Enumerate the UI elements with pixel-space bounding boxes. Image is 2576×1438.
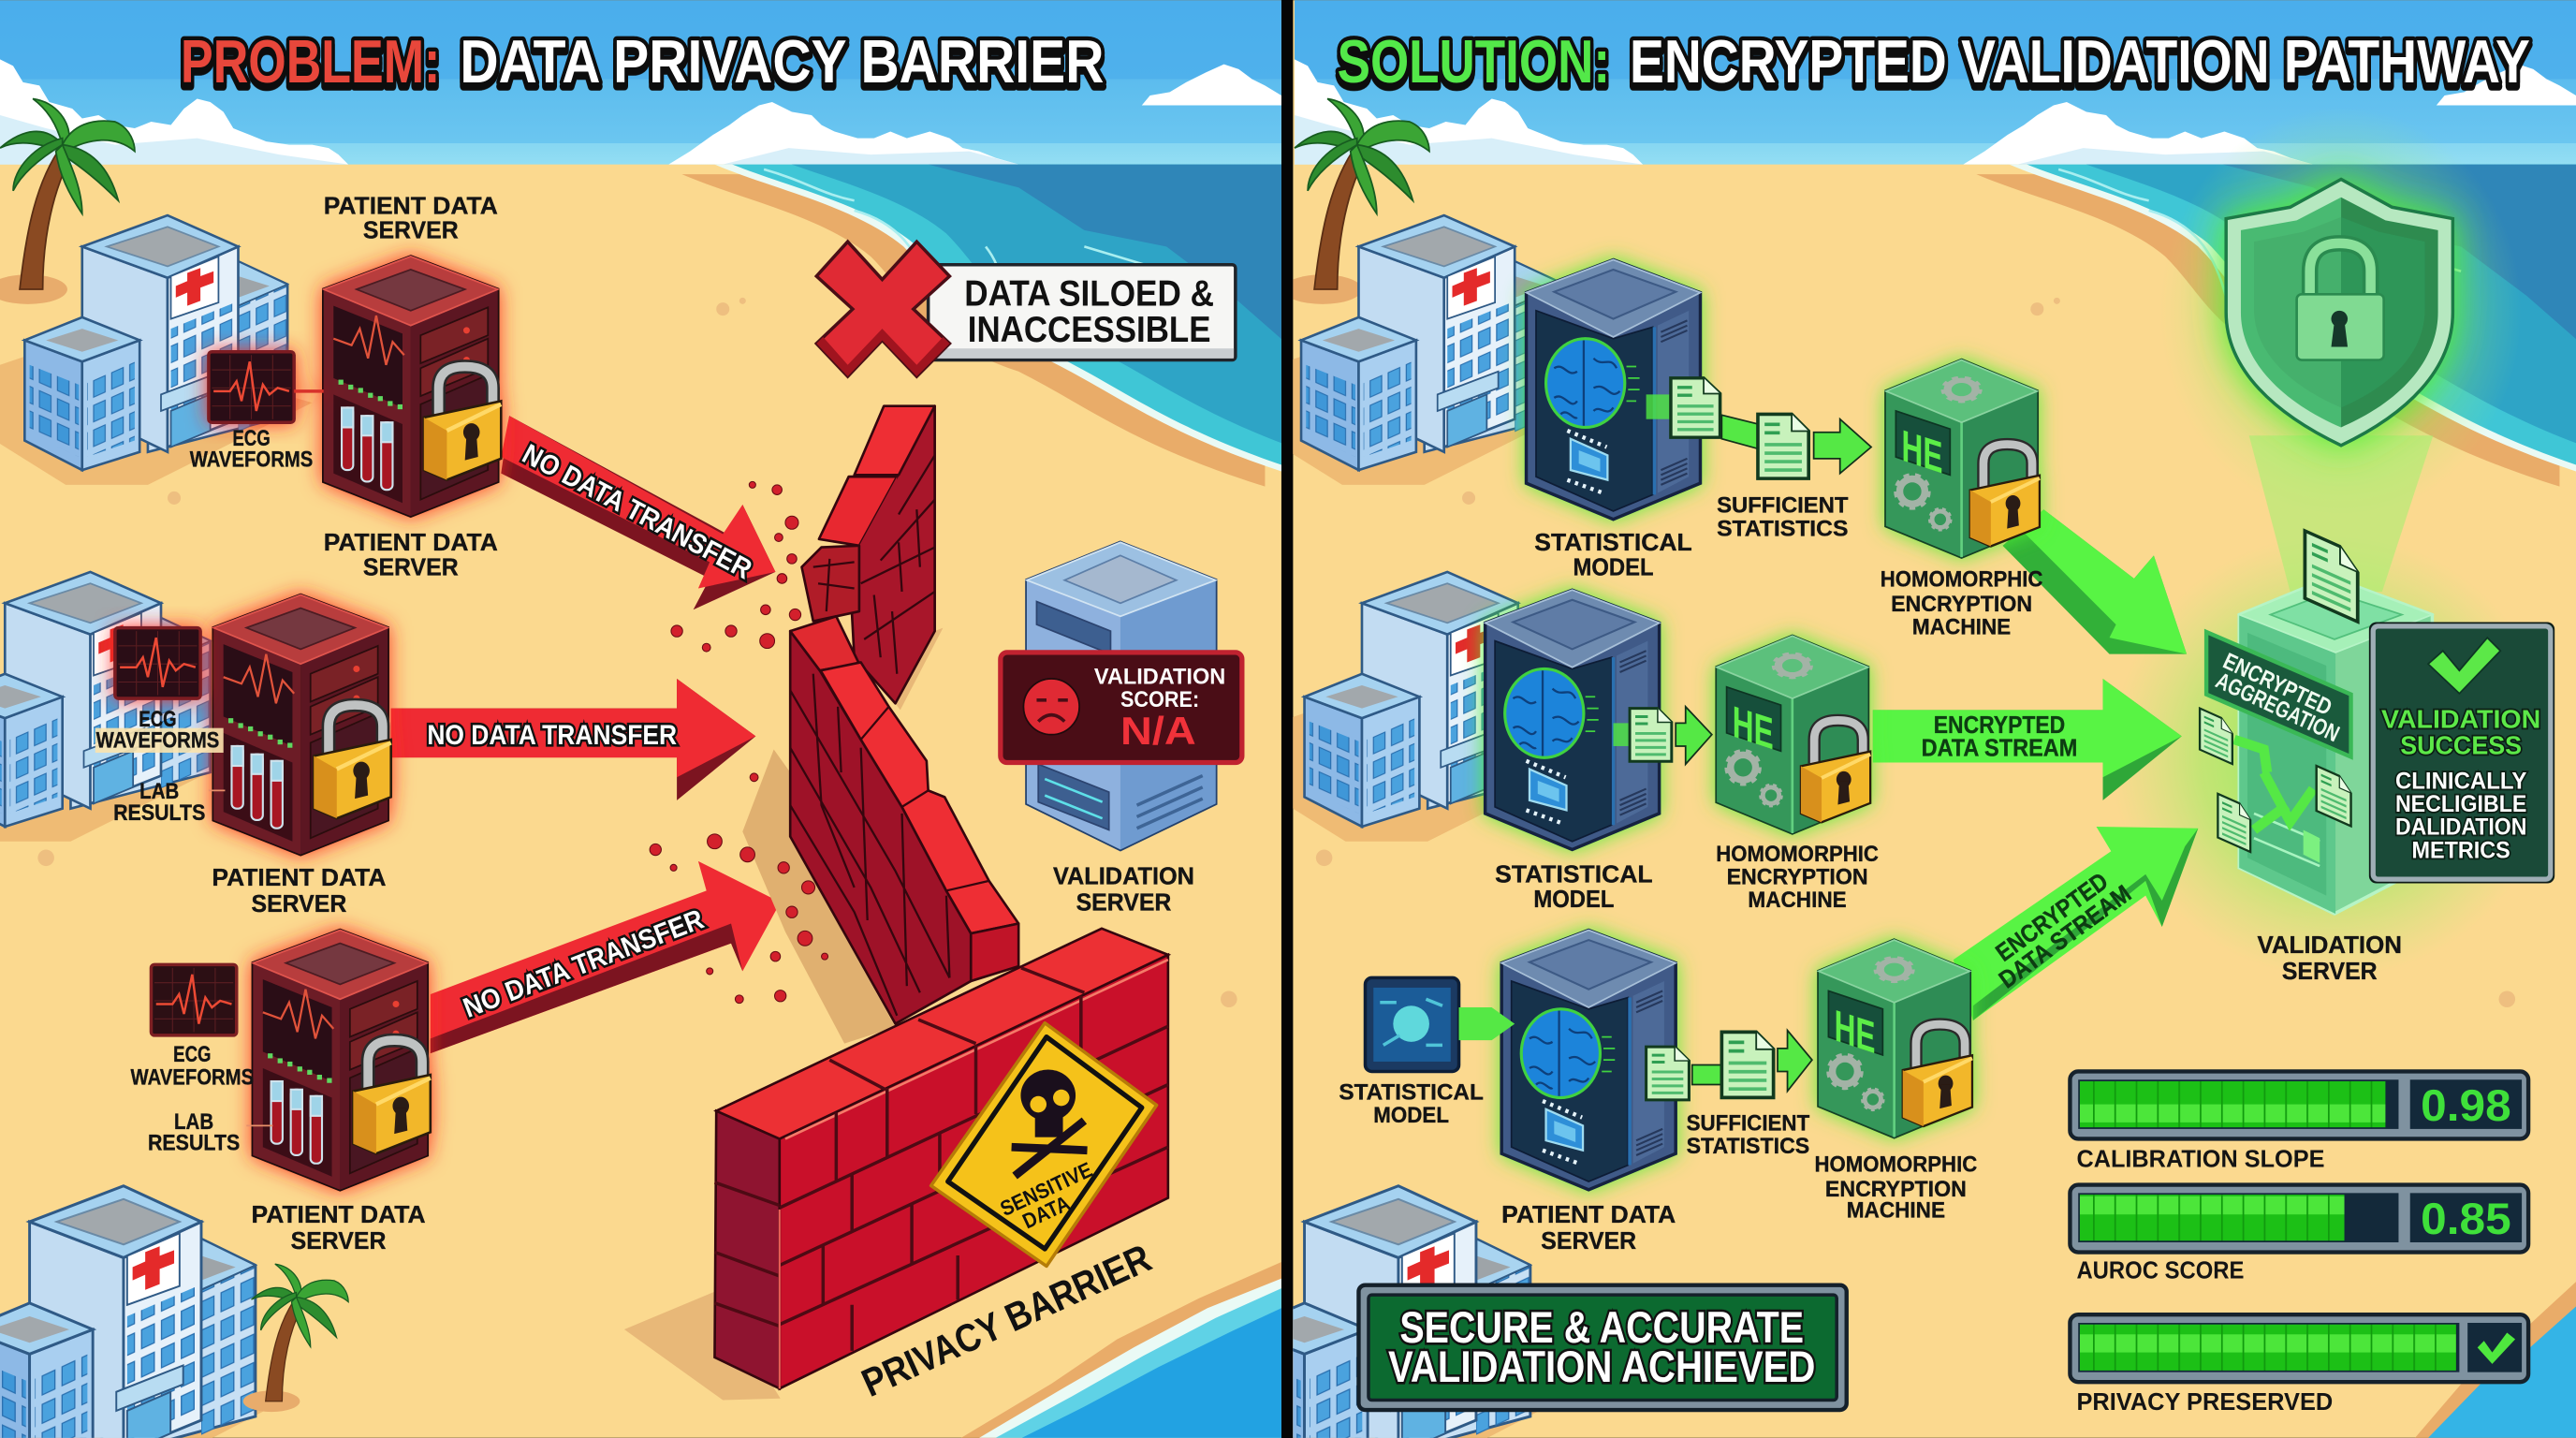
row 3 data flow	[1365, 977, 1812, 1100]
icon: HE machine 3: HE	[1835, 1001, 1875, 1064]
icon: hospital 4	[1293, 213, 1557, 485]
arrow: encrypted data stream 2: ENCRYPTED	[1934, 711, 2065, 739]
arrow: encrypted data stream 3: DATA STREAM	[1994, 879, 2136, 994]
icon: statistical model server 1	[1526, 259, 1701, 520]
label: patient data server 3: PATIENT DATA	[252, 1200, 426, 1228]
label: homomorphic encryption machine 3	[1815, 1153, 1977, 1224]
label: patient data server 1: SERVER	[363, 552, 459, 580]
label: ECG waveforms 3: WAVEFORMS	[131, 1066, 254, 1091]
label: validation server	[1053, 861, 1194, 916]
label: sufficient statistics 3	[1687, 1112, 1810, 1159]
arrow: encrypted data stream 2	[1873, 679, 2182, 800]
callout: data siloed: DATA SILOED &	[964, 274, 1214, 315]
label: sufficient statistics 1	[1717, 494, 1849, 541]
label: statistical model 2: MODEL	[1533, 885, 1614, 913]
barrier wall: upper section	[742, 406, 1018, 1044]
callout: data siloed: INACCESSIBLE	[968, 310, 1211, 350]
icon: red X	[816, 242, 949, 376]
label: homomorphic encryption machine 2: ENCRYPTION	[1727, 865, 1868, 889]
icon: ECG monitor 2	[115, 628, 200, 698]
icon: validation server green	[2239, 577, 2432, 914]
icon: success check	[2428, 638, 2500, 694]
barrier wall: front section	[624, 929, 1168, 1400]
callout: data siloed	[929, 265, 1236, 360]
label: patient data server 3: SERVER	[291, 1226, 386, 1255]
icon: sad face	[1023, 679, 1079, 735]
label: homomorphic encryption machine 3: MACHINE	[1847, 1199, 1945, 1224]
icon: patient data server green	[1501, 931, 1676, 1190]
panel: validation success: NECLIGIBLE	[2395, 792, 2526, 817]
label: statistical model 2	[1495, 860, 1653, 913]
label: ECG waveforms 3: ECG	[173, 1043, 212, 1067]
icon: HE machine 1: HE	[1902, 421, 1942, 483]
icon: ECG monitor 3	[151, 964, 237, 1035]
label: encrypted aggregation tag: ENCRYPTED	[2219, 649, 2335, 721]
icon: document 5	[1721, 1032, 1774, 1097]
icon: HE machine 3	[1819, 940, 1972, 1137]
label: sufficient statistics 3: STATISTICS	[1687, 1135, 1809, 1159]
icon: hospital 3	[0, 1186, 283, 1438]
icon: document 3	[1630, 709, 1672, 761]
label: ECG waveforms 3	[131, 1043, 254, 1091]
panel: validation success: VALIDATION	[2381, 705, 2540, 734]
label: homomorphic encryption machine 1	[1881, 568, 2042, 640]
icon: document 1	[1671, 378, 1720, 437]
arrow: doc to stats	[1721, 415, 1758, 448]
label: sufficient statistics 1: SUFFICIENT	[1717, 494, 1849, 519]
arrow: doc to machine 3	[1778, 1031, 1812, 1092]
icon: hospital 2	[0, 572, 235, 842]
label: validation server: SERVER	[1076, 888, 1171, 916]
panel: validation success: SUCCESS	[2400, 731, 2522, 760]
metric: AUROC score: 0.85	[2421, 1195, 2511, 1244]
banner: secure and accurate validation: VALIDATION ACHIEVED	[1388, 1343, 1815, 1392]
icon: hospital 5	[1293, 571, 1521, 842]
label: validation server green	[2258, 931, 2402, 985]
arrow: green arrow from machine 1	[2002, 509, 2187, 654]
metric: calibration slope: 0.98	[2421, 1081, 2511, 1131]
label: ECG waveforms 1: WAVEFORMS	[190, 448, 313, 473]
arrow: no data transfer 2	[391, 679, 755, 800]
arrow: monitor to server	[1459, 1007, 1515, 1040]
banner: secure and accurate validation: SECURE & ACCURATE	[1399, 1303, 1804, 1353]
icon: ECG monitor 1	[209, 352, 324, 422]
label: sufficient statistics 3: SUFFICIENT	[1687, 1112, 1810, 1137]
label: patient data server 2: PATIENT DATA	[212, 863, 386, 891]
label: patient data server 1	[324, 528, 498, 580]
label: statistical model 1	[1534, 528, 1692, 580]
metric: AUROC score	[2070, 1185, 2528, 1284]
icon: statistical model server 2	[1486, 590, 1660, 850]
label: patient data server 3	[252, 1200, 426, 1255]
arrow: encrypted data stream 3	[1954, 827, 2198, 1020]
label: patient data server 2	[212, 863, 386, 917]
label: patient data server 1: PATIENT DATA	[324, 528, 498, 556]
icon: document entering server	[2305, 531, 2358, 622]
label: lab results 2: LAB	[139, 780, 179, 804]
arrow: no data transfer 2: NO DATA TRANSFER	[427, 720, 677, 751]
arrow: doc 4 to doc 5	[1692, 1064, 1721, 1085]
icon: patient data server 2	[213, 594, 391, 855]
icon: sensitive data warning sign: SENSITIVE	[996, 1157, 1096, 1221]
metric: AUROC score: AUROC SCORE	[2076, 1256, 2244, 1284]
panel: problem background	[0, 0, 1340, 1438]
metric: privacy preserved: PRIVACY PRESERVED	[2076, 1387, 2333, 1416]
label: sufficient statistics 1: STATISTICS	[1717, 517, 1848, 541]
icon: document 4	[1647, 1047, 1689, 1100]
arrow: encrypted data stream 3: ENCRYPTED	[1990, 867, 2114, 967]
icon: statistical model monitor	[1365, 977, 1459, 1071]
debris: broken bricks	[650, 481, 828, 1004]
icon: sensitive data warning sign	[931, 1023, 1157, 1266]
label: patient data server top: SERVER	[363, 216, 459, 244]
label: homomorphic encryption machine 2: MACHINE	[1748, 888, 1847, 913]
icon: shield padlock	[2297, 243, 2384, 360]
icon: shield	[2226, 179, 2452, 446]
arrow: encrypted data stream 2: DATA STREAM	[1922, 733, 2077, 761]
panel: validation success: DALIDATION	[2395, 815, 2526, 841]
label: patient data server top	[324, 191, 498, 244]
label: validation server green: VALIDATION	[2258, 931, 2402, 959]
arrow: no data transfer 3	[431, 861, 781, 1053]
label: encrypted aggregation tag	[2206, 632, 2351, 756]
arrow: no data transfer 1: NO DATA TRANSFER	[518, 438, 756, 585]
icons: aggregated documents and arrows	[2200, 709, 2351, 852]
arrow: stats to machine 1	[1814, 419, 1871, 474]
title: problem heading: PROBLEM:	[181, 27, 440, 95]
title: problem heading: DATA PRIVACY BARRIER	[460, 27, 1104, 95]
panel: validation score	[1001, 653, 1242, 763]
label: statistical model 1: MODEL	[1573, 552, 1654, 580]
label: ECG waveforms 2: WAVEFORMS	[96, 729, 219, 754]
label: validation server green: SERVER	[2282, 957, 2378, 985]
label: ECG waveforms 1	[190, 427, 313, 473]
label: ECG waveforms 2	[95, 708, 224, 754]
icon: patient data server 3	[253, 931, 431, 1190]
icon: patient data server 1	[324, 257, 501, 516]
label: validation server: VALIDATION	[1053, 861, 1194, 889]
metric: calibration slope: CALIBRATION SLOPE	[2076, 1144, 2324, 1172]
panel: validation score: SCORE:	[1120, 688, 1199, 712]
label: privacy barrier: PRIVACY BARRIER	[856, 1236, 1158, 1405]
icon: validation server	[1027, 542, 1216, 850]
title: problem heading	[181, 27, 1104, 95]
metric: calibration slope	[2070, 1071, 2528, 1172]
label: lab results 3	[148, 1110, 272, 1156]
icon: HE machine 1	[1886, 360, 2040, 557]
label: lab results 3: LAB	[174, 1110, 213, 1135]
panel: validation success: METRICS	[2411, 838, 2510, 863]
row 2 data flow	[1614, 707, 1712, 764]
label: homomorphic encryption machine 1: HOMOMORPHIC	[1881, 568, 2042, 593]
icon: HE machine 2: HE	[1733, 697, 1774, 759]
panel: validation score: N/A	[1120, 709, 1196, 753]
label: homomorphic encryption machine 3: ENCRYPTION	[1825, 1178, 1967, 1202]
label: statistical model 3	[1339, 1080, 1484, 1128]
arrow: doc to machine 2	[1676, 707, 1712, 764]
label: patient data server right: SERVER	[1541, 1226, 1636, 1255]
label: homomorphic encryption machine 3: HOMOMORPHIC	[1815, 1153, 1977, 1178]
label: ECG waveforms 1: ECG	[232, 427, 271, 451]
icon: skull and crossbones	[1012, 1070, 1088, 1176]
icon: document 2	[1758, 414, 1808, 478]
label: homomorphic encryption machine 1: ENCRYPTION	[1891, 593, 2032, 617]
label: statistical model 3: STATISTICAL	[1339, 1080, 1484, 1105]
banner: secure and accurate validation	[1358, 1285, 1847, 1410]
icon: sensitive data warning sign: DATA	[1018, 1191, 1074, 1233]
label: patient data server right: PATIENT DATA	[1501, 1200, 1676, 1228]
label: ECG waveforms 2: ECG	[139, 708, 177, 732]
panel: validation success	[2370, 623, 2554, 883]
label: encrypted aggregation tag: AGGREGATION	[2212, 668, 2343, 747]
panel: validation success: CLINICALLY	[2395, 770, 2526, 795]
label: homomorphic encryption machine 1: MACHINE	[1912, 616, 2011, 640]
label: lab results 2	[113, 780, 225, 826]
icon: hospital 1	[0, 215, 312, 485]
title: solution heading: SOLUTION:	[1338, 27, 1610, 95]
label: patient data server right	[1501, 1200, 1676, 1255]
label: patient data server 2: SERVER	[252, 889, 346, 917]
icon: palm tree 2	[243, 1264, 348, 1412]
arrow: no data transfer 3: NO DATA TRANSFER	[460, 903, 708, 1024]
label: patient data server top: PATIENT DATA	[324, 191, 498, 219]
label: lab results 2: RESULTS	[113, 801, 205, 826]
divider between panels	[1281, 0, 1293, 1438]
label: lab results 3: RESULTS	[148, 1132, 240, 1156]
icon: hospital 6	[1293, 1184, 1537, 1438]
label: homomorphic encryption machine 2	[1716, 843, 1879, 913]
metric: privacy preserved	[2070, 1314, 2528, 1416]
label: homomorphic encryption machine 2: HOMOMORPHIC	[1716, 843, 1879, 867]
panel: validation score: VALIDATION	[1094, 665, 1225, 689]
label: statistical model 1: STATISTICAL	[1534, 528, 1692, 556]
row 1 data flow	[1647, 378, 1871, 478]
panel: solution background	[1281, 0, 2576, 1438]
label: statistical model 2: STATISTICAL	[1495, 860, 1653, 888]
icon: HE machine 2	[1717, 636, 1870, 833]
icon: privacy check	[2478, 1333, 2515, 1364]
label: statistical model 3: MODEL	[1373, 1104, 1449, 1128]
